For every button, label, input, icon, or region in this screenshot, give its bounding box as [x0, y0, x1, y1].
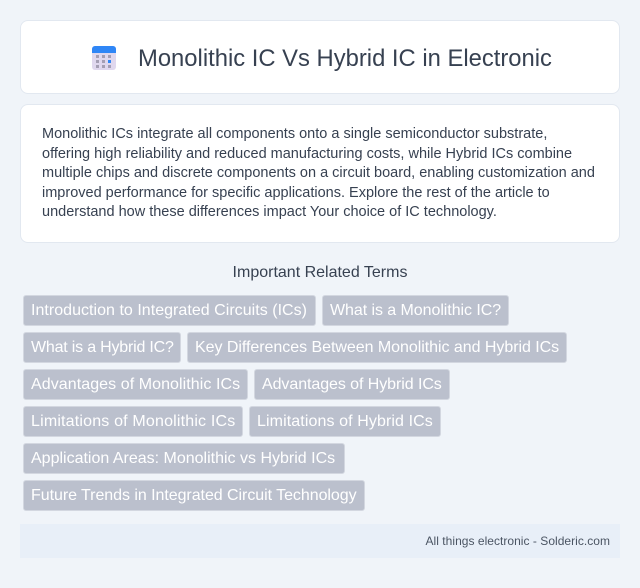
footer credit: All things electronic - Solderic.com — [426, 534, 610, 548]
tag: Future Trends in Integrated Circuit Technology — [31, 487, 357, 504]
tag — [187, 332, 567, 363]
tag: Introduction to Integrated Circuits (ICs) — [31, 302, 307, 319]
tag — [23, 369, 248, 400]
intro paragraph: understand how these differences impact Your choice of IC technology. — [42, 204, 497, 220]
title: Monolithic IC Vs Hybrid IC in Electronic — [138, 45, 552, 72]
tag — [23, 332, 181, 363]
tag: Advantages of Monolithic ICs — [31, 376, 240, 393]
tag — [23, 295, 316, 326]
tag — [322, 295, 509, 326]
icon: calendar — [92, 46, 116, 70]
tag — [23, 443, 345, 474]
tag: Application Areas: Monolithic vs Hybrid ICs — [31, 450, 335, 467]
tags list — [23, 295, 567, 511]
tag: What is a Hybrid IC? — [31, 339, 174, 356]
intro paragraph: improved performance for specific applications. Explore the rest of the article to — [42, 185, 550, 201]
section heading: Important Related Terms — [233, 264, 407, 281]
intro text card — [20, 104, 620, 243]
tag: Key Differences Between Monolithic and Hybrid ICs — [195, 339, 559, 356]
footer bar — [20, 524, 620, 558]
tag: Limitations of Hybrid ICs — [257, 413, 433, 430]
intro paragraph — [42, 126, 595, 220]
intro paragraph: Monolithic ICs integrate all components onto a single semiconductor substrate, — [42, 126, 547, 142]
tag: Advantages of Hybrid ICs — [262, 376, 442, 393]
intro paragraph: offering high reliability and reduced manufacturing costs, while Hybrid ICs combine — [42, 146, 572, 162]
tag — [23, 406, 243, 437]
intro paragraph: multiple chips and discrete components on a circuit board, enabling customization and — [42, 165, 595, 181]
header card — [20, 20, 620, 94]
tag: What is a Monolithic IC? — [330, 302, 501, 319]
tag — [249, 406, 441, 437]
tag — [23, 480, 365, 511]
tag: Limitations of Monolithic ICs — [31, 413, 235, 430]
tag — [254, 369, 450, 400]
